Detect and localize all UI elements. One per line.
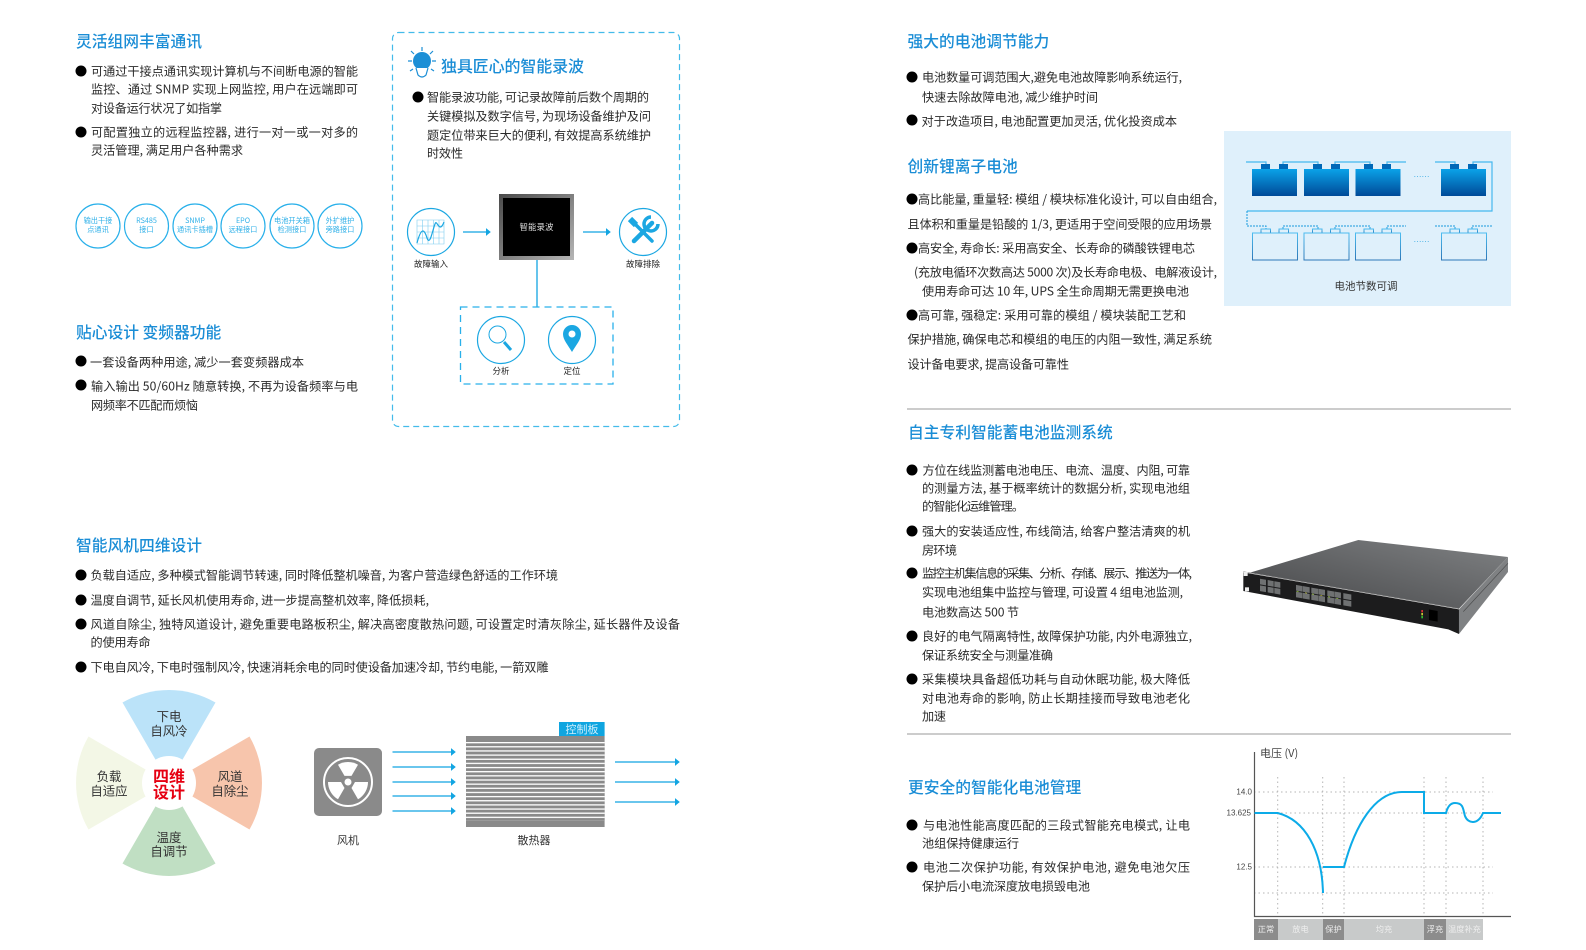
interface badges: RS485: [136, 216, 157, 226]
voltage curve: [1254, 792, 1501, 893]
connector line: [536, 260, 538, 307]
axes: [1254, 752, 1511, 916]
diagram: four-dimensional design wheel: 风道: [218, 767, 242, 785]
text block: monitoring bullets: 对电池寿命的影响, 防止长期挂接而导致电池老化: [922, 690, 1190, 706]
diagram: four-dimensional design wheel: 下电: [157, 707, 181, 725]
text block: networking bullets: 可配置独立的远程监控器, 进行一对一或一对多的: [91, 124, 358, 140]
text block: inverter bullets: [76, 354, 358, 414]
text block: networking bullets: 对设备运行状况了如指掌: [91, 100, 222, 116]
text block: monitoring bullets: 房环境: [922, 542, 957, 558]
chart: charging voltage curve: [1227, 745, 1511, 940]
text block: regulation bullets: 电池数量可调范围大,避免电池故障影响系统运行,: [922, 68, 1182, 86]
panel: intelligent fault recording: [392, 32, 680, 426]
batteries: empty row: [1252, 229, 1486, 260]
text block: monitoring bullets: 实现电池组集中监控与管理, 可设置 4 组电池监测,: [922, 584, 1183, 600]
text block: management bullets: 与电池性能高度匹配的三段式智能充电模式, 让电: [923, 816, 1190, 834]
icon: analysis magnifier: 分析: [492, 365, 510, 377]
text block: regulation bullets: 快速去除故障电池, 减少维护时间: [922, 88, 1098, 106]
heading: battery regulation: 强大的电池调节能力: [908, 29, 1049, 52]
heat sink: 散热器: [518, 832, 550, 848]
interface badges: 外扩维护: [326, 216, 354, 226]
heat sink: 控制板: [566, 721, 598, 737]
text block: fan bullets: [76, 566, 680, 676]
icon: fan: 风机: [337, 832, 359, 848]
text block: monitoring bullets: 的测量方法, 基于概率统计的数据分析, 实现电池组: [922, 480, 1190, 496]
interface badges: 检测接口: [278, 225, 306, 235]
text block: monitoring bullets: 保证系统安全与测量准确: [922, 646, 1053, 664]
diagram: four-dimensional design wheel: [76, 690, 262, 876]
axis ticks: 12.5: [1236, 862, 1253, 872]
arrow: input to recorder: [463, 231, 486, 233]
interface badges: SNMP: [185, 216, 205, 226]
text block: lithium bullets: 且体积和重量是铅酸的 1/3, 更适用于空间受限的应用场景: [908, 216, 1212, 232]
panel: battery count diagram: [1224, 131, 1511, 306]
diagram: four-dimensional design wheel: 自调节: [150, 842, 188, 860]
phase bands: 均充: [1376, 923, 1392, 935]
text block: recording description: [412, 88, 651, 162]
heading: battery management: 更安全的智能化电池管理: [908, 775, 1081, 798]
text block: networking bullets: 可通过干接点通讯实现计算机与不间断电源的智能: [91, 62, 358, 80]
phase bands: 放电: [1292, 923, 1309, 935]
text block: inverter bullets: 输入输出 50/60Hz 随意转换, 不再为设备频率与电: [91, 378, 358, 394]
diagram: four-dimensional design wheel: 自除尘: [211, 782, 249, 800]
interface badges: 远程接口: [229, 225, 257, 235]
heading: battery monitoring: 自主专利智能蓄电池监测系统: [908, 420, 1113, 443]
text block: management bullets: [906, 816, 1190, 894]
panel: analysis and location: [460, 307, 613, 384]
text block: lithium bullets: 高可靠, 强稳定: 采用可靠的模组 / 模块装配工艺和: [918, 306, 1186, 324]
arrows: airflow out of heat sink: [615, 762, 675, 802]
heat sink: [466, 721, 605, 848]
text block: networking bullets: 灵活管理, 满足用户各种需求: [91, 142, 243, 158]
icon: location pin: 定位: [563, 365, 581, 377]
text block: fan bullets: 风道自除尘, 独特风道设计, 避免重要电路板积尘, 解决高密度散热问题, 可设置定时清灰除尘, 延长器件及设备: [90, 616, 680, 632]
axis title: 电压 (V): [1260, 745, 1298, 761]
divider: [907, 408, 1511, 410]
text block: regulation bullets: [906, 68, 1182, 130]
icon: analysis magnifier: [478, 316, 524, 377]
interface badges: [76, 204, 362, 248]
icon: fault input: [408, 208, 454, 270]
diagram: four-dimensional design wheel: 温度: [157, 828, 181, 846]
interface badges: EPO: [236, 216, 250, 226]
text block: inverter bullets: 一套设备两种用途, 减少一套变频器成本: [90, 354, 304, 370]
interface badges: 通讯卡插槽: [177, 225, 213, 235]
text block: monitoring bullets: 的智能化运维管理。: [922, 498, 1024, 514]
interface badges: 旁路接口: [326, 225, 354, 235]
panel heading: 独具匠心的智能录波: [441, 53, 584, 77]
text block: management bullets: 池组保持健康运行: [922, 834, 1019, 852]
text block: fan bullets: 负载自适应, 多种模式智能调节转速, 同时降低整机噪音, 为客户营造绿色舒适的工作环境: [90, 566, 558, 584]
text block: lithium bullets: 高比能量, 重量轻: 模组 / 模块标准化设计, 可以自由组合,: [918, 190, 1217, 208]
heading: lithium battery: 创新锂离子电池: [908, 154, 1018, 177]
phase bands: 浮充: [1427, 923, 1443, 935]
text block: monitoring bullets: 监控主机集信息的采集、分析、存储、展示、推送为一体,: [922, 564, 1192, 582]
text block: lithium bullets: 使用寿命可达 10 年, UPS 全生命周期无需更换电池: [922, 282, 1189, 300]
diagram: four-dimensional design wheel: 自风冷: [150, 722, 188, 740]
text block: monitoring bullets: 采集模块具备超低功耗与自动休眠功能, 极大降低: [922, 670, 1190, 688]
diagram: four-dimensional design wheel: 负载: [97, 767, 121, 785]
icon: location pin: [548, 316, 596, 377]
interface badges: 电池开关箱: [274, 216, 310, 226]
text block: recording description: 题定位带来巨大的便利, 有效提高系统维护: [427, 126, 651, 144]
diagram caption: 电池节数可调: [1334, 278, 1398, 294]
text block: networking bullets: 监控、通过 SNMP 实现上网监控, 用户在远端即可: [91, 80, 358, 98]
icon: troubleshooting tools: 故障排除: [626, 258, 660, 270]
text block: regulation bullets: 对于改造项目, 电池配置更加灵活, 优化投资成本: [922, 112, 1177, 130]
text block: fan bullets: 的使用寿命: [90, 634, 150, 650]
text block: lithium bullets: 高安全, 寿命长: 采用高安全、长寿命的磷酸铁锂电芯: [918, 240, 1195, 256]
grid: [1254, 777, 1493, 916]
interface badges: 点通讯: [87, 225, 109, 235]
icon: troubleshooting tools: [620, 208, 666, 270]
text block: management bullets: 保护后小电流深度放电损毁电池: [922, 878, 1090, 894]
axis ticks: [1227, 788, 1253, 872]
diagram: four-dimensional design wheel: 四维: [153, 763, 185, 787]
image: battery monitor device: [1243, 540, 1508, 634]
icon: fault input: 故障输入: [414, 258, 448, 270]
text block: lithium bullets: 设计备电要求, 提高设备可靠性: [908, 356, 1069, 372]
recorder box: [499, 194, 574, 260]
axis ticks: 14.0: [1236, 788, 1253, 796]
heading: flexible networking: 灵活组网丰富通讯: [76, 29, 202, 52]
phase bands: 保护: [1325, 923, 1342, 935]
diagram: four-dimensional design wheel: 自适应: [90, 782, 128, 800]
text block: management bullets: 电池二次保护功能, 有效保护电池, 避免电池欠压: [923, 858, 1190, 876]
phase bands: [1254, 919, 1483, 940]
diagram: four-dimensional design wheel: 设计: [153, 779, 185, 803]
batteries: filled row: [1252, 164, 1486, 196]
text block: inverter bullets: 网频率不匹配而烦恼: [91, 396, 198, 414]
text block: fan bullets: 温度自调节, 延长风机使用寿命, 进一步提高整机效率, 降低损耗,: [90, 592, 429, 608]
text block: lithium bullets: 保护措施, 确保电芯和模组的电压的内阻一致性, 满足系统: [908, 330, 1212, 348]
text block: lithium bullets: [906, 190, 1217, 372]
text block: monitoring bullets: 加速: [922, 708, 946, 724]
icon: light bulb: [408, 47, 436, 77]
recorder box: 智能录波: [519, 221, 554, 233]
batteries: filled row: ······: [1414, 172, 1429, 181]
wires: top row: [1246, 162, 1492, 211]
interface badges: 输出干接: [84, 216, 112, 226]
arrows: airflow into heat sink: [392, 752, 451, 811]
text block: monitoring bullets: 强大的安装适应性, 布线简洁, 给客户整洁清爽的机: [922, 522, 1190, 540]
text block: recording description: 时效性: [427, 144, 463, 162]
text block: monitoring bullets: 电池数高达 500 节: [922, 604, 1019, 620]
icon: fan: [314, 748, 382, 848]
text block: fan bullets: 下电自风冷, 下电时强制风冷, 快速消耗余电的同时使设备加速冷却, 节约电能, 一箭双雕: [90, 658, 548, 676]
phase bands: 正常: [1258, 923, 1274, 935]
wires: bottom row: [1247, 211, 1492, 229]
divider: [907, 733, 1511, 735]
text block: monitoring bullets: [906, 462, 1192, 724]
arrow: recorder to troubleshooting: [583, 231, 606, 233]
interface badges: 接口: [139, 225, 154, 235]
text block: monitoring bullets: 方位在线监测蓄电池电压、电流、温度、内阻, 可靠: [922, 462, 1190, 478]
text block: recording description: 关键模拟及数字信号, 为现场设备维护及问: [427, 108, 651, 124]
axis ticks: 13.625: [1227, 808, 1252, 818]
phase bands: 温度补充: [1448, 923, 1481, 935]
heading: fan design: 智能风机四维设计: [76, 533, 202, 556]
text block: networking bullets: [76, 62, 358, 158]
text block: recording description: 智能录波功能, 可记录故障前后数个周期的: [427, 88, 649, 106]
text block: lithium bullets: (充放电循环次数高达 5000 次)及长寿命电极、电解液设计,: [914, 264, 1217, 280]
panel: battery count diagram: ······: [1414, 237, 1429, 246]
heading: inverter function: 贴心设计 变频器功能: [76, 320, 222, 343]
text block: monitoring bullets: 良好的电气隔离特性, 故障保护功能, 内外电源独立,: [922, 628, 1192, 644]
